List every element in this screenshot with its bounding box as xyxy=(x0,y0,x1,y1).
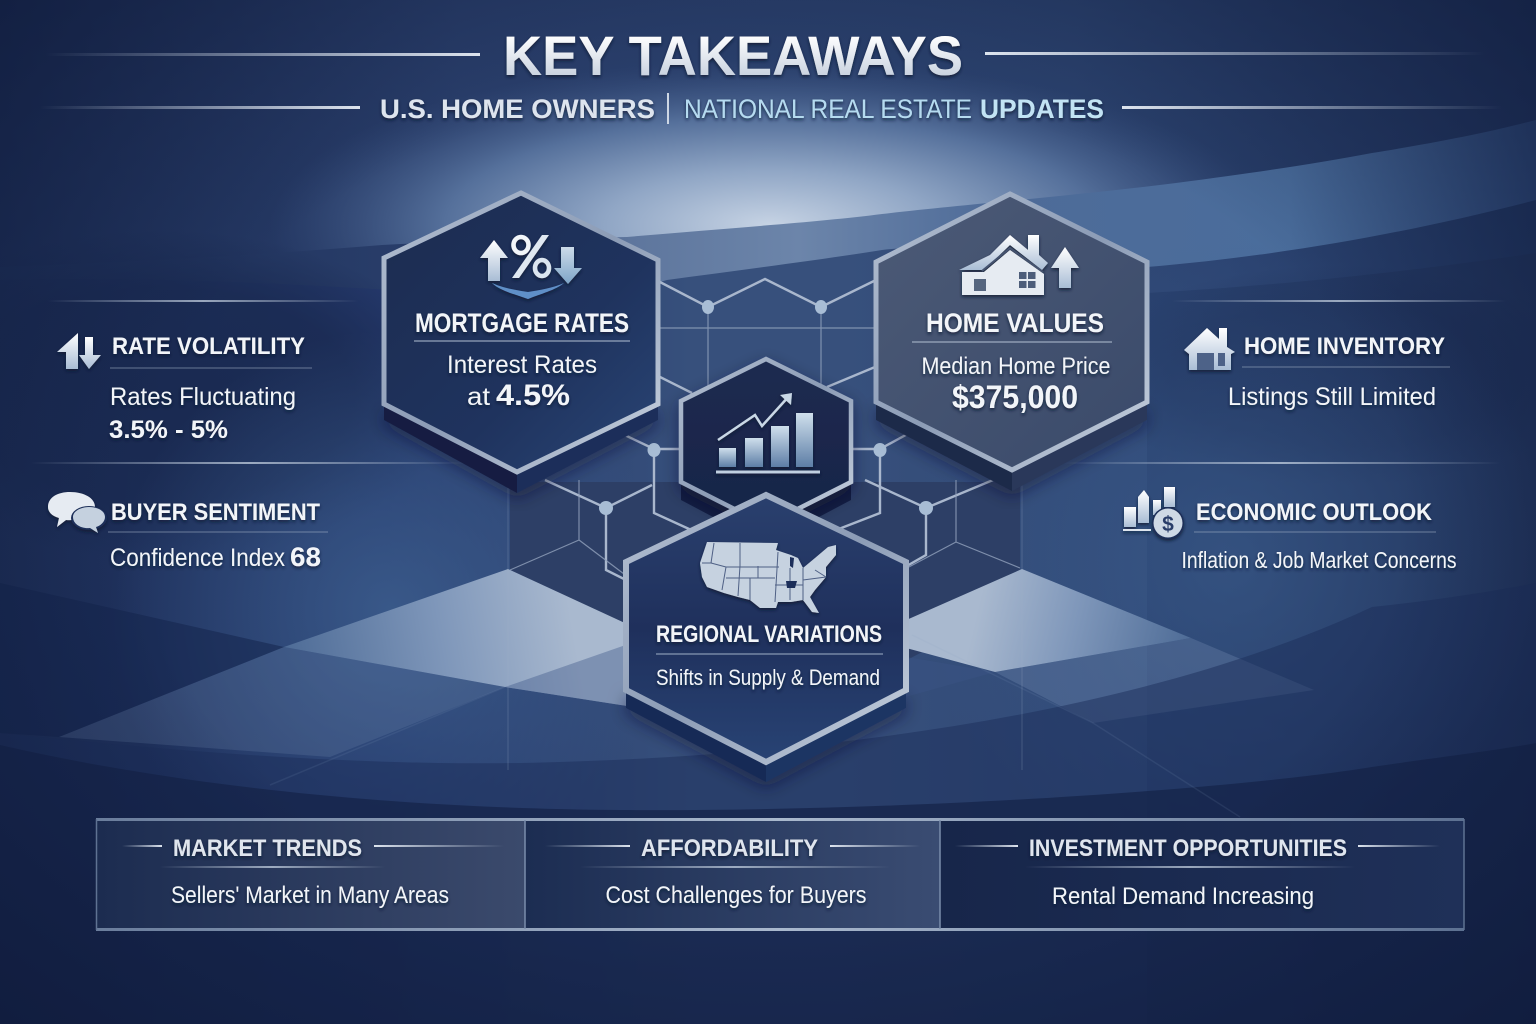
subtitle xyxy=(40,93,1502,124)
title xyxy=(45,24,1485,87)
subtitle: U.S. HOME OWNERS xyxy=(380,94,655,124)
callout: home inventory xyxy=(1184,328,1450,411)
icon: speech bubbles xyxy=(48,492,107,533)
panel: mortgage rates hexagon: 4.5% xyxy=(496,379,570,412)
callout: buyer sentiment xyxy=(48,492,328,572)
panel: affordability: AFFORDABILITY xyxy=(641,835,818,862)
central dark panel xyxy=(510,482,1020,660)
heading: buyer sentiment: BUYER SENTIMENT xyxy=(111,499,320,526)
icon: bars and dollar coin xyxy=(1123,487,1184,539)
heading: home values: HOME VALUES xyxy=(926,308,1104,338)
panel: home values hexagon xyxy=(876,194,1147,491)
text: listings still limited: Listings Still Limited xyxy=(1228,383,1436,411)
connector network xyxy=(510,279,1020,580)
text: shifts in supply and demand: Shifts in Supply & Demand xyxy=(656,665,880,690)
icon: percent with arrows xyxy=(480,235,582,299)
panel: mortgage rates hexagon: at xyxy=(467,383,490,411)
panel: regional variations hexagon xyxy=(626,495,906,782)
text: interest rates: Interest Rates xyxy=(447,351,597,379)
text: inflation and job market concerns: Inflation & Job Market Concerns xyxy=(1182,547,1456,573)
text: median home price: Median Home Price xyxy=(922,353,1110,380)
panel: affordability xyxy=(545,835,920,909)
divider rules xyxy=(30,300,1506,464)
subtitle: NATIONAL REAL ESTATE xyxy=(684,94,972,124)
panel: investment opportunities: INVESTMENT OPPORTUNITIES xyxy=(1029,835,1347,862)
text: rates fluctuating: Rates Fluctuating xyxy=(110,383,296,411)
panel: mortgage rates hexagon xyxy=(384,193,658,493)
light beams xyxy=(0,583,284,737)
panel: investment opportunities: Rental Demand Increasing xyxy=(1052,883,1314,910)
icon: bar chart with rising arrow xyxy=(716,393,820,472)
arcs xyxy=(0,583,1536,1024)
title: KEY TAKEAWAYS xyxy=(503,24,963,87)
icon: house with up arrow xyxy=(959,235,1079,295)
panel: investment opportunities xyxy=(955,835,1440,910)
text: confidence index: Confidence Index xyxy=(110,544,285,572)
panel: market trends: MARKET TRENDS xyxy=(173,835,362,862)
panel: home values hexagon: $375,000 xyxy=(952,379,1078,415)
heading: economic outlook: ECONOMIC OUTLOOK xyxy=(1196,499,1433,526)
panel: market trends xyxy=(122,835,504,909)
callout: economic outlook xyxy=(1123,487,1456,573)
icon: house xyxy=(1184,328,1235,370)
panel: affordability: Cost Challenges for Buyers xyxy=(606,882,866,909)
panel: market trends: Sellers' Market in Many Areas xyxy=(171,882,449,909)
callout: rate volatility: 3.5% - 5% xyxy=(109,416,228,444)
icon: up down arrows xyxy=(57,333,101,369)
heading: home inventory: HOME INVENTORY xyxy=(1244,333,1445,360)
icon: bars and dollar coin: $ xyxy=(1162,513,1174,536)
heading: regional variations: REGIONAL VARIATIONS xyxy=(656,621,882,648)
heading: mortgage rates: MORTGAGE RATES xyxy=(415,308,629,338)
subtitle: UPDATES xyxy=(980,94,1104,124)
callout: rate volatility xyxy=(57,333,312,444)
panel: center chart hexagon xyxy=(681,359,851,545)
panel: bottom strip xyxy=(96,818,1464,931)
callout: buyer sentiment: 68 xyxy=(290,542,321,572)
icon: U.S. map xyxy=(700,542,836,613)
heading: rate volatility: RATE VOLATILITY xyxy=(112,333,305,360)
